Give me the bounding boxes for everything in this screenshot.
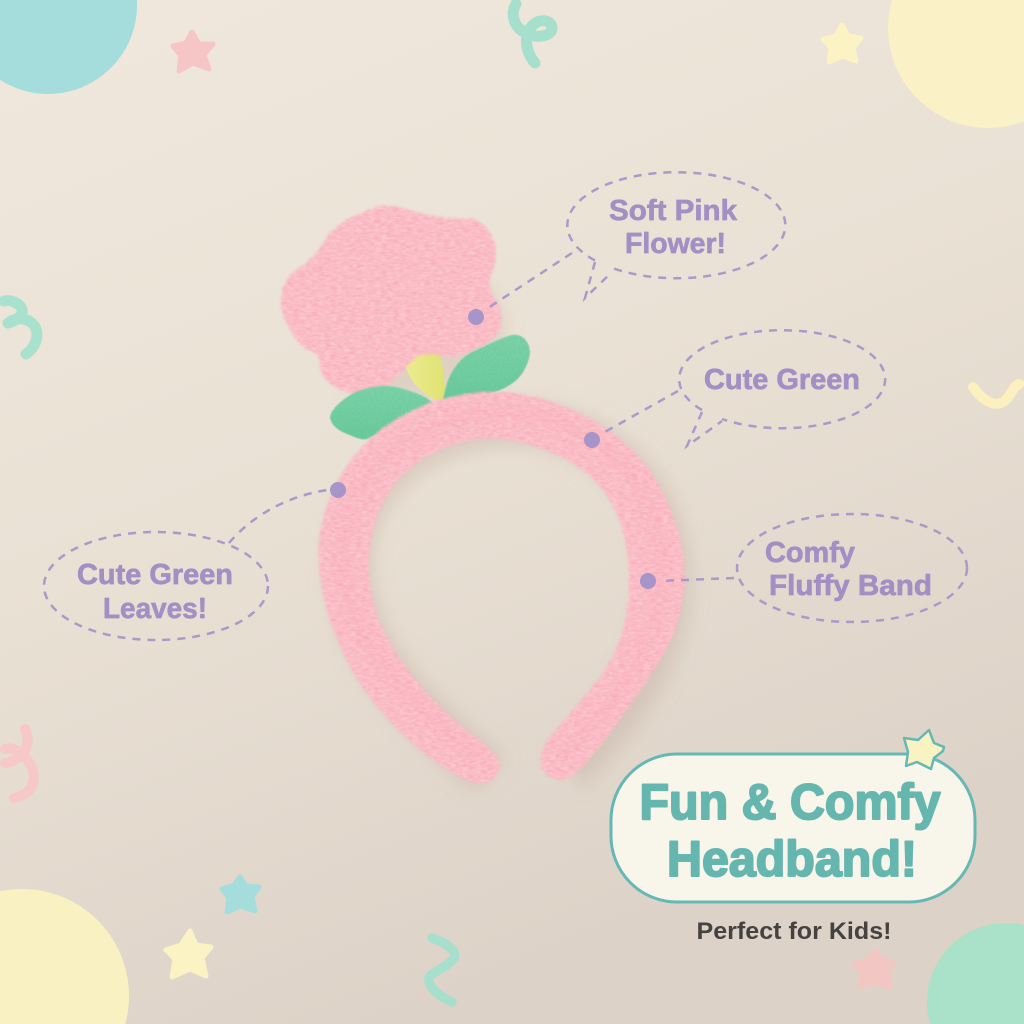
callout: soft pink flower: Soft Pink (609, 195, 738, 227)
callout: comfy fluffy band: Comfy (765, 537, 855, 569)
title badge (611, 730, 975, 902)
icon: right leaf (443, 335, 530, 401)
icon: yellow stem (405, 345, 445, 400)
callout: cute green leaves (44, 482, 346, 640)
product: fluffy headband with flower (283, 208, 682, 781)
callout: comfy fluffy band (640, 514, 967, 622)
callout: soft pink flower: Flower! (625, 228, 726, 260)
subtitle: Perfect for Kids! (696, 918, 892, 945)
decorative stars (166, 25, 894, 987)
callout: cute green leaves: Leaves! (103, 593, 207, 625)
callout: soft pink flower (468, 172, 785, 325)
callout: cute green: Cute Green (704, 364, 860, 396)
fluffy band (321, 395, 682, 781)
icon: star on badge (904, 730, 944, 769)
callout: cute green leaves: Cute Green (77, 559, 233, 591)
heading: Fun & Comfy (640, 774, 941, 830)
callout: cute green (584, 330, 885, 448)
icon: pink flower (283, 208, 499, 391)
icon: left leaf (330, 386, 433, 439)
title badge: Headband! (667, 831, 917, 887)
callout: comfy fluffy band: Fluffy Band (769, 570, 932, 602)
band centre shading (342, 414, 660, 762)
soft shadow (350, 424, 668, 775)
